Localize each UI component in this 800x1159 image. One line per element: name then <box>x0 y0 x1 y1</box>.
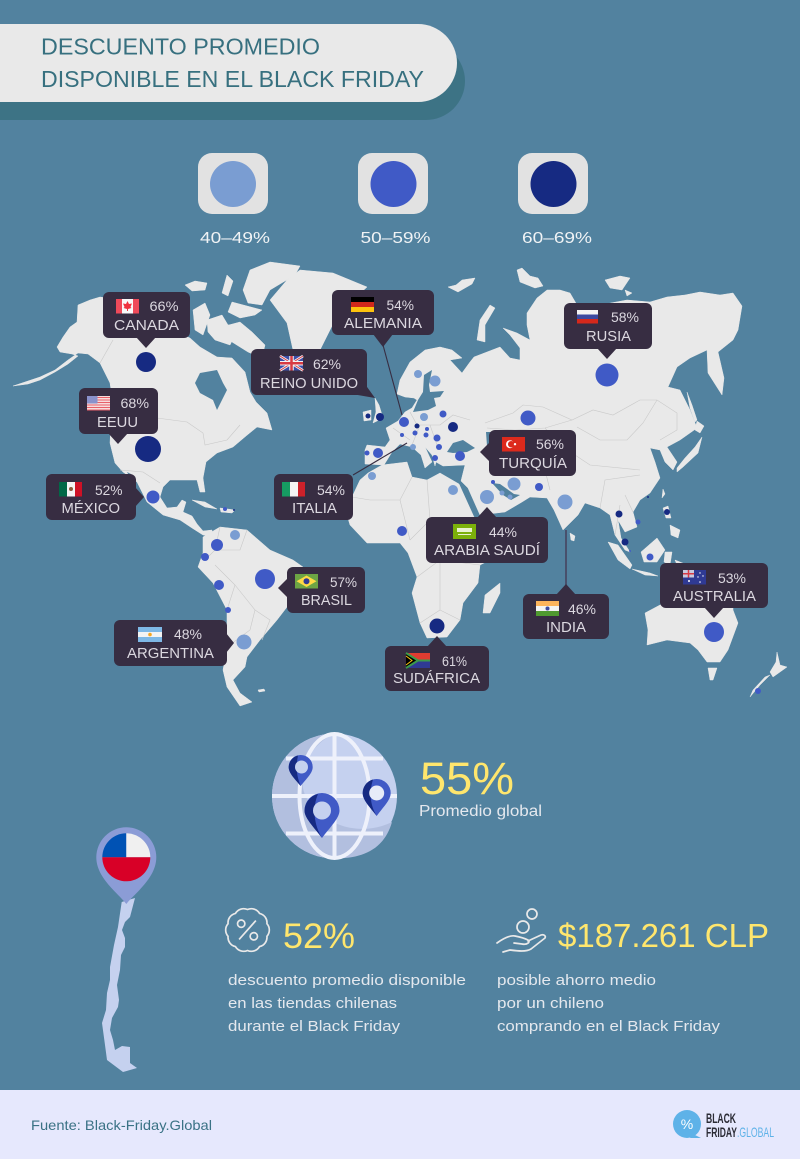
flag: Turquía <box>502 437 525 452</box>
legend item: 60–69% <box>518 153 592 247</box>
flag: Alemania <box>351 297 374 312</box>
stat: store discount <box>226 909 466 1035</box>
legend item: 50–59%: 50–59% <box>360 230 430 247</box>
legend item: 40–49%: 40–49% <box>200 230 270 247</box>
title: DISPONIBLE EN EL BLACK FRIDAY <box>41 66 424 92</box>
label: Reino Unido: 62% <box>313 356 341 372</box>
label: Turquía <box>480 430 576 476</box>
label: Canada <box>103 292 190 348</box>
flag: EEUU <box>87 396 110 410</box>
label: Argentina: ARGENTINA <box>127 646 214 662</box>
label: Sudáfrica: SUDÁFRICA <box>393 670 480 687</box>
flag: India <box>536 601 559 616</box>
label: Argentina: 48% <box>174 626 202 642</box>
icon: discount badge <box>226 909 269 951</box>
flag: México <box>59 482 82 496</box>
flag: Canada <box>116 299 139 314</box>
label: Arabia Saudí: ARABIA SAUDÍ <box>434 542 540 559</box>
flag: Argentina <box>138 627 162 642</box>
flag: Reino Unido <box>280 356 303 370</box>
label: EEUU <box>79 388 158 444</box>
label: Italia <box>274 474 353 520</box>
logo: FRIDAY <box>706 1124 737 1140</box>
label: Reino Unido <box>251 349 375 398</box>
source: Fuente: Black-Friday.Global <box>31 1117 212 1133</box>
label: EEUU: 68% <box>120 395 149 411</box>
global average: 55% <box>420 753 514 804</box>
legend <box>198 153 592 247</box>
description: en las tiendas chilenas <box>228 995 397 1012</box>
Chile territory <box>102 898 137 1072</box>
flag: Italia <box>282 482 305 496</box>
icon: globe with pins <box>272 734 397 858</box>
pin with Chilean flag <box>96 827 156 904</box>
icon: small pin <box>289 755 313 786</box>
title: DESCUENTO PROMEDIO <box>41 34 320 60</box>
label: Rusia: RUSIA <box>586 329 631 345</box>
label: Brasil: 57% <box>330 574 357 590</box>
label: Turquía: TURQUÍA <box>499 455 567 472</box>
icon: Chile map with flag pin <box>96 827 156 1072</box>
stat: store discount: 52% <box>283 917 355 956</box>
global average <box>419 753 542 820</box>
title banner <box>0 24 465 120</box>
label: Sudáfrica <box>385 636 489 691</box>
label: Alemania <box>332 290 434 347</box>
country borders <box>100 340 677 647</box>
description: posible ahorro medio <box>497 972 656 989</box>
label: Australia <box>660 563 768 618</box>
label: Arabia Saudí <box>426 507 548 563</box>
flag: Brasil <box>295 574 318 588</box>
logo: % <box>681 1116 693 1132</box>
description <box>228 972 466 1035</box>
icon: large pin <box>304 793 340 838</box>
title <box>41 34 424 92</box>
label: India: INDIA <box>546 620 586 636</box>
label: India: 46% <box>568 601 596 617</box>
icon: right pin <box>363 779 391 816</box>
flag: Sudáfrica <box>406 653 430 668</box>
connector lines <box>353 345 566 586</box>
stat: average saving: $187.261 CLP <box>558 917 769 954</box>
label: Italia: 54% <box>317 482 345 498</box>
logo: .GLOBAL <box>737 1124 774 1140</box>
label: Arabia Saudí: 44% <box>489 524 517 540</box>
label: Canada: CANADA <box>114 318 179 334</box>
data dots <box>135 352 761 694</box>
label: Alemania: ALEMANIA <box>344 316 422 332</box>
world map <box>13 262 787 706</box>
legend item: 60–69%: 60–69% <box>522 230 592 247</box>
label: Australia: 53% <box>718 570 746 586</box>
flag: Arabia Saudí <box>453 524 476 539</box>
seas <box>127 370 520 500</box>
label: Canada: 66% <box>150 298 178 314</box>
label: Alemania: 54% <box>386 297 414 313</box>
label: Reino Unido: REINO UNIDO <box>260 376 358 392</box>
icon: hand with coins <box>497 909 545 952</box>
description: comprando en el Black Friday <box>497 1018 721 1035</box>
label: Sudáfrica: 61% <box>442 653 467 669</box>
label: Brasil <box>278 567 365 613</box>
logo: BLACK <box>706 1110 736 1126</box>
label: Australia: AUSTRALIA <box>673 589 756 605</box>
footer <box>0 1090 800 1159</box>
label: México: MÉXICO <box>62 500 120 517</box>
description: descuento promedio disponible <box>228 972 466 989</box>
description: durante el Black Friday <box>228 1018 401 1035</box>
description: por un chileno <box>497 995 604 1012</box>
logo <box>673 1110 774 1140</box>
stat: average saving <box>497 909 769 1035</box>
label: Italia: ITALIA <box>292 501 337 517</box>
label: Rusia: 58% <box>611 309 639 325</box>
legend item: 50–59% <box>358 153 430 247</box>
label: México: 52% <box>95 482 122 498</box>
label: Rusia <box>564 303 652 359</box>
description <box>497 972 721 1035</box>
global average: Promedio global <box>419 803 542 820</box>
label: Brasil: BRASIL <box>301 593 352 609</box>
label: México <box>46 474 144 520</box>
label: Turquía: 56% <box>536 436 564 452</box>
legend item: 40–49% <box>198 153 270 247</box>
label: Argentina <box>114 620 234 666</box>
label: India <box>523 584 609 639</box>
flag: Rusia <box>577 310 598 324</box>
flag: Australia <box>683 570 706 584</box>
label: EEUU: EEUU <box>97 415 138 431</box>
